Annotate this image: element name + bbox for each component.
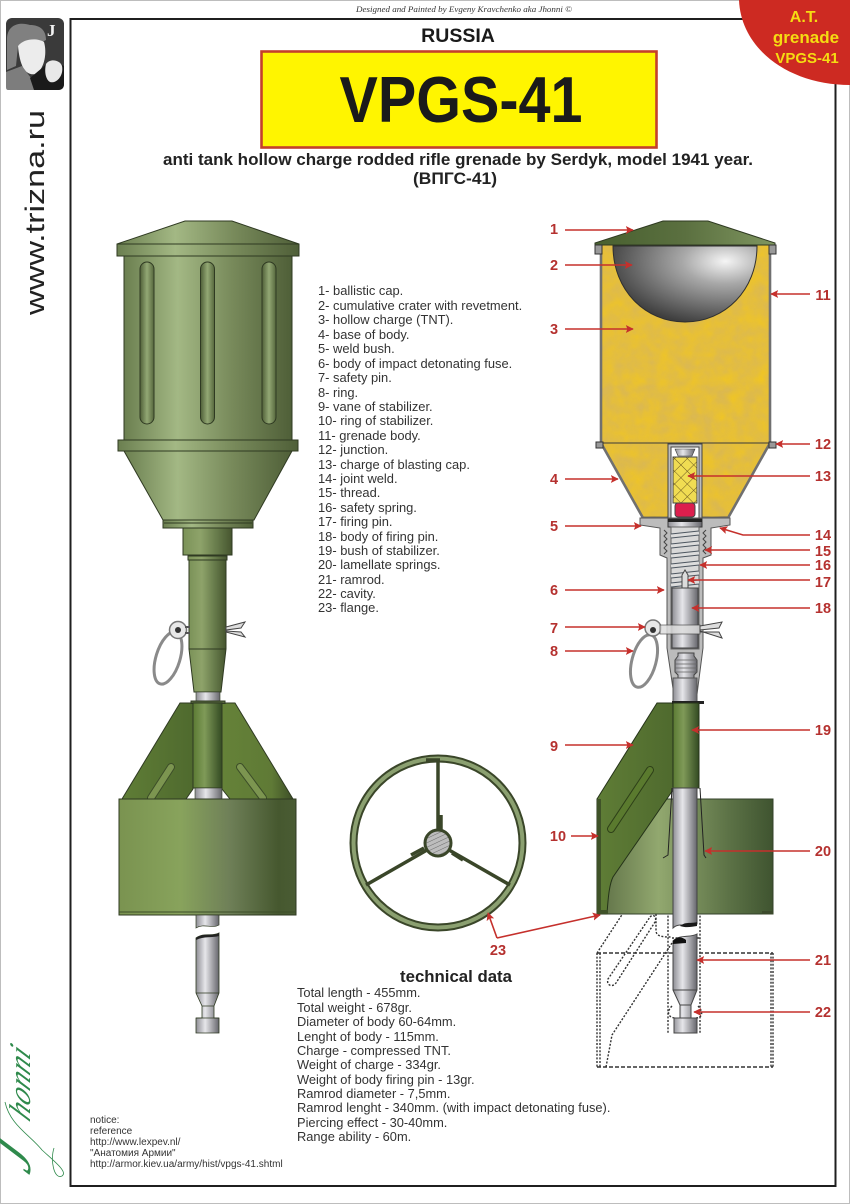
parts list: 10- ring of stabilizer. xyxy=(318,413,433,428)
callout 1 xyxy=(550,222,633,238)
callout 14: 14 xyxy=(815,528,831,544)
notice and references: "Анатомия Армии" xyxy=(90,1148,176,1159)
callout 16: 16 xyxy=(815,558,831,574)
parts list: 22- cavity. xyxy=(318,586,376,601)
callout 8: 8 xyxy=(550,644,558,660)
callout 20 xyxy=(705,844,831,860)
safety pin and ring, exterior xyxy=(149,622,245,687)
signature xyxy=(0,1027,64,1183)
cross section of stabilizer ring xyxy=(354,758,522,928)
vane slot xyxy=(611,770,650,829)
safety spring xyxy=(671,533,699,585)
technical data list: Ramrod diameter - 7,5mm. xyxy=(297,1086,450,1101)
parts list: 19- bush of stabilizer. xyxy=(318,543,440,558)
title plate: VPGS-41 xyxy=(340,63,582,136)
fuse tube xyxy=(189,560,226,692)
parts list: 7- safety pin. xyxy=(318,370,392,385)
parts list: 18- body of firing pin. xyxy=(318,529,438,544)
blasting cap charge xyxy=(673,457,697,503)
parts list: 8- ring. xyxy=(318,385,358,400)
callout 15 xyxy=(705,544,831,560)
parts list: 12- junction. xyxy=(318,442,388,457)
portrait icon: J xyxy=(47,21,56,40)
callout 12 xyxy=(776,437,831,453)
callout 11 xyxy=(771,288,831,304)
parts list: 16- safety spring. xyxy=(318,500,417,515)
vane slots xyxy=(151,767,171,798)
callout 3 xyxy=(550,322,633,338)
callout 13: 13 xyxy=(815,469,831,485)
notice and references: reference xyxy=(90,1126,133,1137)
parts list: 4- base of body. xyxy=(318,327,410,342)
callout 6 xyxy=(550,583,664,599)
dotted hidden lines of stabilizer xyxy=(597,858,773,1067)
callout 21: 21 xyxy=(815,953,831,969)
parts list: 2- cumulative crater with revetment. xyxy=(318,298,522,313)
callout 14 xyxy=(720,528,831,544)
callout 10: 10 xyxy=(550,829,566,845)
corner tab: A.T. grenade VPGS-41: VPGS-41 xyxy=(775,50,839,67)
callout 5: 5 xyxy=(550,519,558,535)
callout 19: 19 xyxy=(815,723,831,739)
callout 18: 18 xyxy=(815,601,831,617)
notice and references: http://armor.kiev.ua/army/hist/vpgs-41.shtml xyxy=(90,1159,283,1170)
callout 5 xyxy=(550,519,641,535)
corner tab: A.T. grenade VPGS-41: grenade xyxy=(773,28,839,47)
technical data list: Lenght of body - 115mm. xyxy=(297,1029,439,1044)
subtitle xyxy=(163,151,753,188)
callout 17: 17 xyxy=(815,575,831,591)
technical data list: Total length - 455mm. xyxy=(297,985,421,1000)
junction xyxy=(596,442,776,448)
callout 10 xyxy=(550,829,598,845)
stabilizer box rear xyxy=(597,799,773,914)
callout 16 xyxy=(700,558,831,574)
parts list: 17- firing pin. xyxy=(318,514,393,529)
parts list xyxy=(318,283,522,615)
website vertical text: www.trizna.ru xyxy=(20,110,50,316)
callout 1: 1 xyxy=(550,222,558,238)
technical data list xyxy=(297,985,610,1144)
parts list: 23- flange. xyxy=(318,600,379,615)
parts list: 1- ballistic cap. xyxy=(318,283,403,298)
parts list: 14- joint weld. xyxy=(318,471,398,486)
callout 7: 7 xyxy=(550,621,558,637)
cap xyxy=(595,221,775,245)
parts list: 21- ramrod. xyxy=(318,572,385,587)
subtitle: (ВПГС-41) xyxy=(413,170,497,188)
stabilizer vane xyxy=(597,703,673,914)
technical data list: Total weight - 678gr. xyxy=(297,1000,412,1015)
body wall xyxy=(601,245,770,518)
fuse well xyxy=(668,444,702,518)
stabilizer bush xyxy=(672,701,704,704)
thread xyxy=(664,530,706,554)
callout arrows and numbers xyxy=(488,222,831,1021)
inner bore xyxy=(671,527,699,649)
safety pin and ring, section xyxy=(625,620,722,690)
flange xyxy=(163,520,253,528)
cone base xyxy=(124,451,292,520)
technical data heading: technical data xyxy=(400,967,513,986)
technical data list: Range ability - 60m. xyxy=(297,1129,411,1144)
callout 4: 4 xyxy=(550,472,558,488)
vanes of stabilizer xyxy=(122,703,193,799)
ramrod xyxy=(196,915,219,928)
ballistic cap xyxy=(117,221,299,256)
callout 11: 11 xyxy=(815,288,831,304)
parts list: 6- body of impact detonating fuse. xyxy=(318,356,512,371)
callout 4 xyxy=(550,472,618,488)
corner tab: A.T. grenade VPGS-41: A.T. xyxy=(790,9,818,26)
callout 8 xyxy=(550,644,633,660)
base flange xyxy=(640,518,730,702)
junction collar xyxy=(118,440,298,451)
parts list: 9- vane of stabilizer. xyxy=(318,399,433,414)
notice and references: http://www.lexpev.nl/ xyxy=(90,1137,181,1148)
cumulative crater xyxy=(613,246,757,322)
stabilizer top plate and tube xyxy=(191,701,225,704)
grenade body xyxy=(124,256,292,440)
technical data list: Weight of body firing pin - 13gr. xyxy=(297,1072,475,1087)
technical data list: Ramrod lenght - 340mm. (with impact detonating fuse). xyxy=(297,1100,610,1115)
parts list: 5- weld bush. xyxy=(318,341,395,356)
notice and references: notice: xyxy=(90,1115,119,1126)
ramrod xyxy=(673,788,697,928)
technical data list: Diameter of body 60-64mm. xyxy=(297,1014,456,1029)
heading: country: RUSSIA xyxy=(421,25,495,47)
callout 9: 9 xyxy=(550,739,558,755)
TNT charge xyxy=(601,245,770,517)
flutes xyxy=(140,262,276,424)
callout 9 xyxy=(550,739,633,755)
callout 15: 15 xyxy=(815,544,831,560)
parts list: 20- lamellate springs. xyxy=(318,557,441,572)
weld bush xyxy=(183,528,232,555)
callout 18 xyxy=(692,601,831,617)
callout 22 xyxy=(694,1005,831,1021)
callout 2 xyxy=(550,258,632,274)
parts list: 13- charge of blasting cap. xyxy=(318,457,470,472)
callout 12: 12 xyxy=(815,437,831,453)
section view of grenade xyxy=(595,221,776,1033)
silver rod section xyxy=(196,692,220,701)
silver rod lower xyxy=(195,788,222,799)
parts list: 11- grenade body. xyxy=(318,428,421,443)
firing pin xyxy=(682,570,688,588)
credit line: Designed and Painted by Evgeny Kravchenko aka Jhonni © xyxy=(355,4,573,14)
ring of stabilizer xyxy=(119,799,296,915)
callout 23: 23 xyxy=(490,943,506,959)
callout 2: 2 xyxy=(550,258,558,274)
parts list: 15- thread. xyxy=(318,485,380,500)
subtitle: anti tank hollow charge rodded rifle grenade by Serdyk, model 1941 year. xyxy=(163,151,753,169)
thread of ramrod tip xyxy=(675,653,697,678)
lamellate springs xyxy=(663,788,706,858)
callout 21 xyxy=(697,953,831,969)
callout 7 xyxy=(550,621,645,637)
technical data list: Weight of charge - 334gr. xyxy=(297,1057,441,1072)
callout 22: 22 xyxy=(815,1005,831,1021)
callout 23 xyxy=(488,913,600,959)
callout 6: 6 xyxy=(550,583,558,599)
technical data list: Charge - compressed TNT. xyxy=(297,1043,451,1058)
corner tab: A.T. grenade VPGS-41 xyxy=(739,0,850,85)
exterior view of grenade xyxy=(117,221,299,1033)
callout 19 xyxy=(692,723,831,739)
technical data list: Piercing effect - 30-40mm. xyxy=(297,1115,447,1130)
notice and references xyxy=(90,1115,283,1170)
title plate xyxy=(262,52,656,148)
parts list: 3- hollow charge (TNT). xyxy=(318,312,453,327)
callout 3: 3 xyxy=(550,322,558,338)
portrait icon xyxy=(6,18,64,90)
callout 20: 20 xyxy=(815,844,831,860)
